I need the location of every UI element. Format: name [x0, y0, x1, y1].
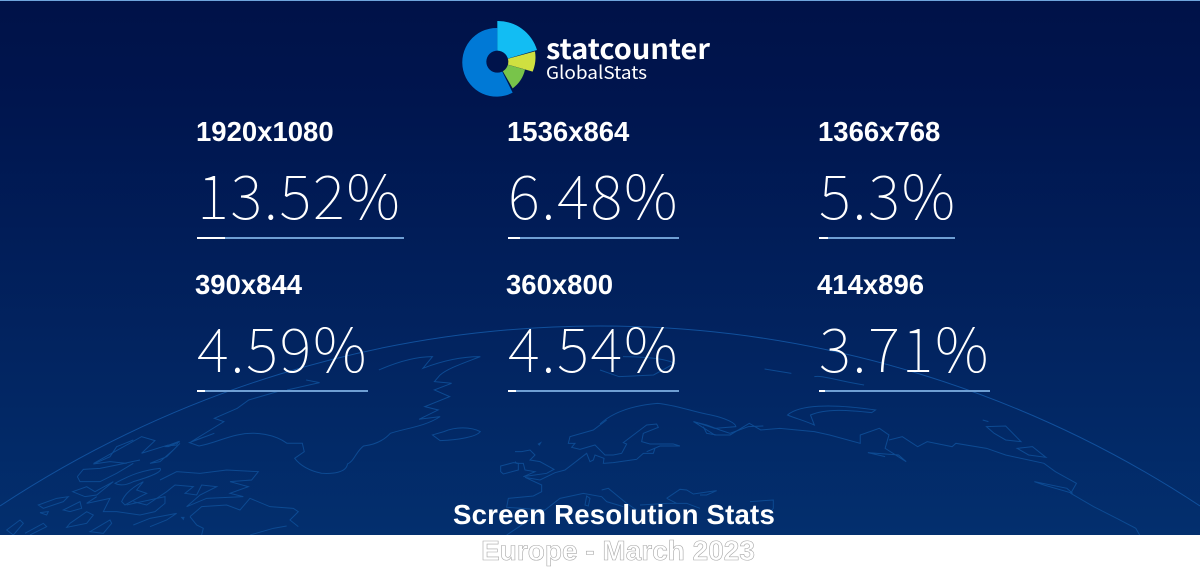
stat: 1536x864 [507, 116, 679, 239]
progress bar [197, 390, 368, 392]
logo subtitle: GlobalStats [546, 59, 647, 85]
progress bar [197, 237, 404, 239]
label: 1366x768 [818, 116, 940, 147]
value: 6.48% [508, 148, 679, 237]
subtitle: Europe - March 2023 [481, 535, 755, 566]
value: 4.59% [197, 301, 368, 390]
stat: 390x844 [195, 269, 368, 392]
label: 1536x864 [507, 116, 629, 147]
logo dark blue segment [462, 28, 513, 97]
progress bar [819, 237, 955, 239]
logo centre hole [486, 51, 508, 73]
label: 360x800 [506, 269, 613, 300]
logo yellow segment [497, 51, 535, 72]
stat: 360x800 [506, 269, 679, 392]
progress bar [508, 237, 679, 239]
stat: 1920x1080 [196, 116, 404, 239]
label: 414x896 [817, 269, 924, 300]
label: 390x844 [195, 269, 302, 300]
title: Screen Resolution Stats [453, 499, 775, 530]
logo cyan segment [497, 21, 537, 62]
logo green segment [497, 62, 525, 88]
value: 3.71% [819, 301, 990, 390]
progress bar [508, 390, 679, 392]
logo [462, 21, 711, 97]
logo wordmark: statcounter [546, 28, 711, 68]
progress bar [819, 390, 990, 392]
value: 5.3% [819, 148, 957, 237]
value: 13.52% [197, 148, 402, 237]
label: 1920x1080 [196, 116, 334, 147]
stat: 414x896 [817, 269, 990, 392]
stat: 1366x768 [818, 116, 957, 239]
value: 4.54% [508, 301, 679, 390]
